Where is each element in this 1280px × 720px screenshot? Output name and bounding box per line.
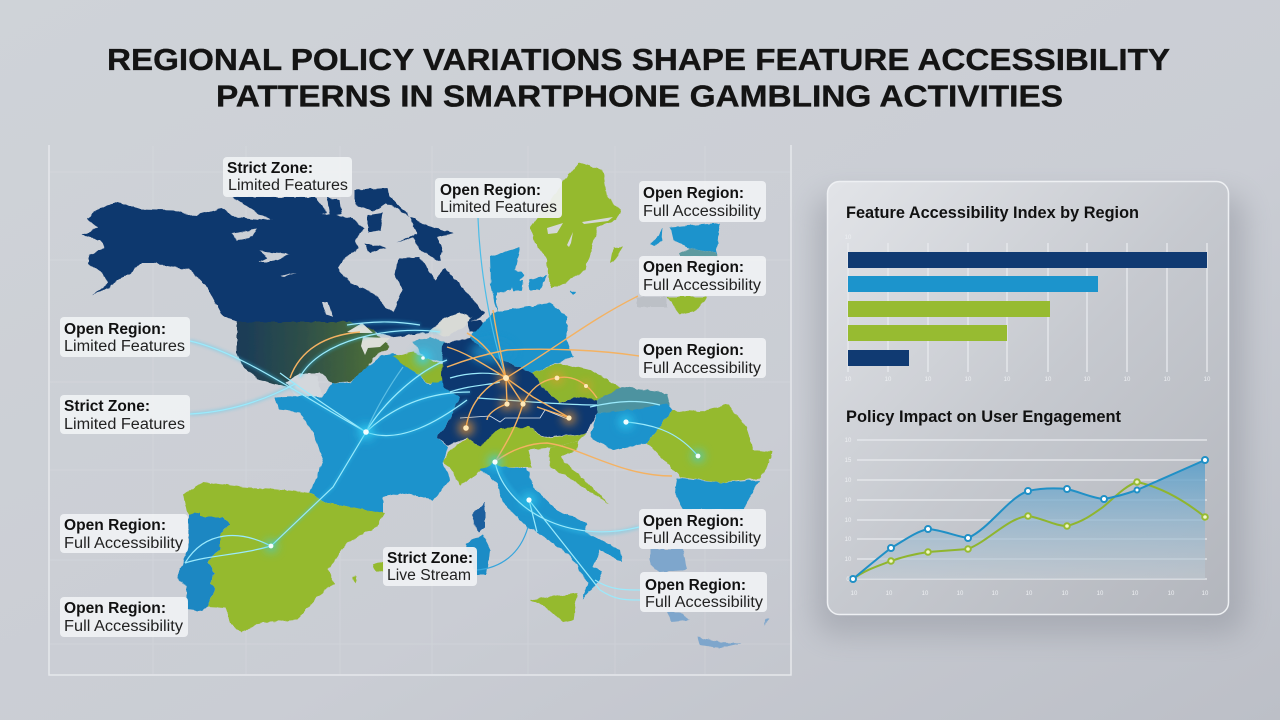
region: Baltic green area (667, 297, 707, 314)
connection arcs: cyan (185, 218, 698, 600)
glow: northern Germany (470, 340, 514, 364)
callout: Open Region, Full Accessibility (Iberia lower): Full Accessibility (64, 618, 183, 635)
line chart: user engagement: 15 (845, 458, 852, 464)
region: Portugal (177, 512, 230, 611)
callout: Strict Zone, Limited Features (north): Strict Zone: (227, 160, 313, 177)
bar chart: accessibility index: 10 (1204, 377, 1211, 383)
callout: Open Region, Full Accessibility (5): Full Accessibility (645, 594, 763, 611)
region: Czechia (533, 363, 622, 402)
callout: Open Region, Full Accessibility (5): Open Region: (645, 577, 746, 594)
line chart: user engagement: 10 (845, 498, 852, 504)
callout: Open Region, Full Accessibility (3): Full Accessibility (643, 360, 761, 377)
line chart: user engagement: 10 (845, 438, 852, 444)
region: Belarus grey area (637, 297, 667, 307)
callout: Open Region, Full Accessibility (3) (639, 338, 766, 378)
bar chart: accessibility index: 10 (925, 377, 932, 383)
line chart: user engagement (845, 438, 1209, 597)
heading: bar chart: Feature Accessibility Index by Region (846, 203, 1139, 222)
callout: Open Region, Full Accessibility (1): Open Region: (643, 185, 744, 202)
region: Benelux (393, 352, 447, 384)
callout: Open Region, Full Accessibility (1): Full Accessibility (643, 203, 761, 220)
line chart: user engagement: 10 (1168, 591, 1175, 597)
bar chart: accessibility index: 10 (845, 377, 852, 383)
callout: Open Region, Full Accessibility (4) (639, 509, 766, 549)
title (107, 43, 1170, 114)
region: Romania (647, 404, 772, 483)
line chart: user engagement: 10 (1097, 591, 1104, 597)
callout: Strict Zone, Limited Features (west) (60, 395, 190, 434)
line chart: user engagement: 10 (845, 537, 852, 543)
callout: Open Region, Full Accessibility (2) (639, 256, 766, 296)
Germany internal borders (460, 410, 570, 422)
hub markers: cyan (266, 351, 703, 551)
title: PATTERNS IN SMARTPHONE GAMBLING ACTIVITIES (216, 80, 1063, 114)
region: Bulgaria (675, 478, 760, 510)
callout: Open Region, Limited Features (west): Open Region: (64, 321, 166, 338)
region: Spain (183, 482, 385, 633)
line chart: user engagement: 10 (851, 591, 858, 597)
callout: Open Region, Limited Features (top centre): Open Region: (440, 182, 541, 199)
bar chart: accessibility index (845, 235, 1211, 383)
region: Poland and Denmark (470, 247, 576, 373)
callout: Strict Zone, Live Stream: Live Stream (387, 567, 471, 584)
callout: Strict Zone, Limited Features (north) (223, 157, 352, 197)
region: Italy (480, 463, 622, 600)
line chart: user engagement: 10 (845, 518, 852, 524)
line chart: user engagement: 10 (922, 591, 929, 597)
markers: blue (850, 457, 1208, 582)
line chart: user engagement: 10 (845, 478, 852, 484)
callout: Strict Zone, Live Stream: Strict Zone: (387, 550, 473, 567)
region: Gulf area (285, 373, 322, 397)
region: Canada and Alaska (82, 188, 488, 337)
region: Croatia (548, 442, 610, 505)
heading: line chart: Policy Impact on User Engagement (846, 407, 1121, 426)
region: Germany (437, 338, 597, 447)
region: Estonia and Latvia (670, 223, 720, 253)
callout: Open Region, Full Accessibility (Iberia upper) (60, 514, 188, 553)
line chart: user engagement: 10 (1202, 591, 1209, 597)
callout: Strict Zone, Limited Features (west): Strict Zone: (64, 398, 150, 415)
region: Greece (650, 549, 770, 648)
region: Slovakia (597, 387, 670, 413)
region: Canada inland lakes (232, 229, 333, 317)
bar chart: accessibility index: 10 (1164, 377, 1171, 383)
line chart: user engagement: 0 (846, 577, 850, 583)
callout: Open Region, Full Accessibility (2): Open Region: (643, 259, 744, 276)
callout: Open Region, Full Accessibility (5) (640, 572, 767, 612)
region: Great Lakes (347, 323, 390, 355)
callout: Open Region, Full Accessibility (Iberia lower) (60, 597, 188, 637)
region: Lithuania area (680, 248, 719, 257)
series: blue line (853, 460, 1205, 579)
callout: Open Region, Limited Features (west): Limited Features (64, 338, 185, 355)
callout: Strict Zone, Live Stream (383, 547, 477, 586)
callout: Open Region, Full Accessibility (Iberia upper): Open Region: (64, 517, 166, 534)
bar chart: accessibility index: 10 (885, 377, 892, 383)
bar chart: accessibility index: 10 (965, 377, 972, 383)
title: REGIONAL POLICY VARIATIONS SHAPE FEATURE ACCESSIBILITY (107, 43, 1170, 77)
callout: Open Region, Full Accessibility (2): Full Accessibility (643, 277, 761, 294)
callout: Open Region, Full Accessibility (3): Open Region: (643, 342, 744, 359)
series: green line (853, 482, 1205, 579)
callout: Open Region, Limited Features (west) (60, 317, 190, 357)
callout: Open Region, Full Accessibility (1) (639, 181, 766, 222)
bar chart: accessibility index: 10 (1084, 377, 1091, 383)
callout: Open Region, Limited Features (top centre) (435, 178, 562, 218)
region: Balearic Islands (352, 561, 385, 583)
map land masses (82, 163, 772, 648)
region: United States (237, 322, 390, 387)
markers: green (888, 479, 1208, 564)
callout: Strict Zone, Limited Features (west): Limited Features (64, 416, 185, 433)
region: Alpine and northern Italy (443, 427, 587, 485)
line chart: user engagement: 10 (992, 591, 999, 597)
callout: Open Region, Limited Features (top centre): Limited Features (440, 199, 557, 216)
hub markers: orange (459, 371, 590, 435)
panel: policy map (49, 145, 791, 675)
bar chart: accessibility index: 10 (845, 235, 852, 241)
bar chart: accessibility index: 10 (1004, 377, 1011, 383)
region: Sweden (530, 163, 620, 287)
region: Sicily (530, 593, 577, 622)
callout: Strict Zone, Limited Features (north): Limited Features (228, 177, 348, 194)
region: Gotland (610, 247, 623, 263)
region: Corsica (472, 502, 485, 532)
bar chart: accessibility index: 10 (1045, 377, 1052, 383)
region: France (273, 353, 460, 513)
callout: Open Region, Full Accessibility (Iberia upper): Full Accessibility (64, 535, 183, 552)
line chart: user engagement: 10 (1132, 591, 1139, 597)
line chart: user engagement: 10 (957, 591, 964, 597)
region: Hungary (590, 403, 673, 450)
area under line (853, 460, 1205, 579)
callout: Open Region, Full Accessibility (Iberia lower): Open Region: (64, 600, 166, 617)
callout: Open Region, Full Accessibility (4): Full Accessibility (643, 530, 761, 547)
bar chart: accessibility index: 10 (1124, 377, 1131, 383)
callout: Open Region, Full Accessibility (4): Open Region: (643, 513, 744, 530)
panel: charts (815, 182, 1245, 635)
line chart: user engagement: 10 (1026, 591, 1033, 597)
connection arcs: orange (290, 296, 672, 476)
region: British Isles patch (430, 313, 472, 337)
line chart: user engagement: 10 (1062, 591, 1069, 597)
region: Sweden lakes (547, 217, 613, 247)
line chart: user engagement: 10 (845, 557, 852, 563)
region: Sardinia (465, 535, 490, 575)
line chart: user engagement: 10 (886, 591, 893, 597)
